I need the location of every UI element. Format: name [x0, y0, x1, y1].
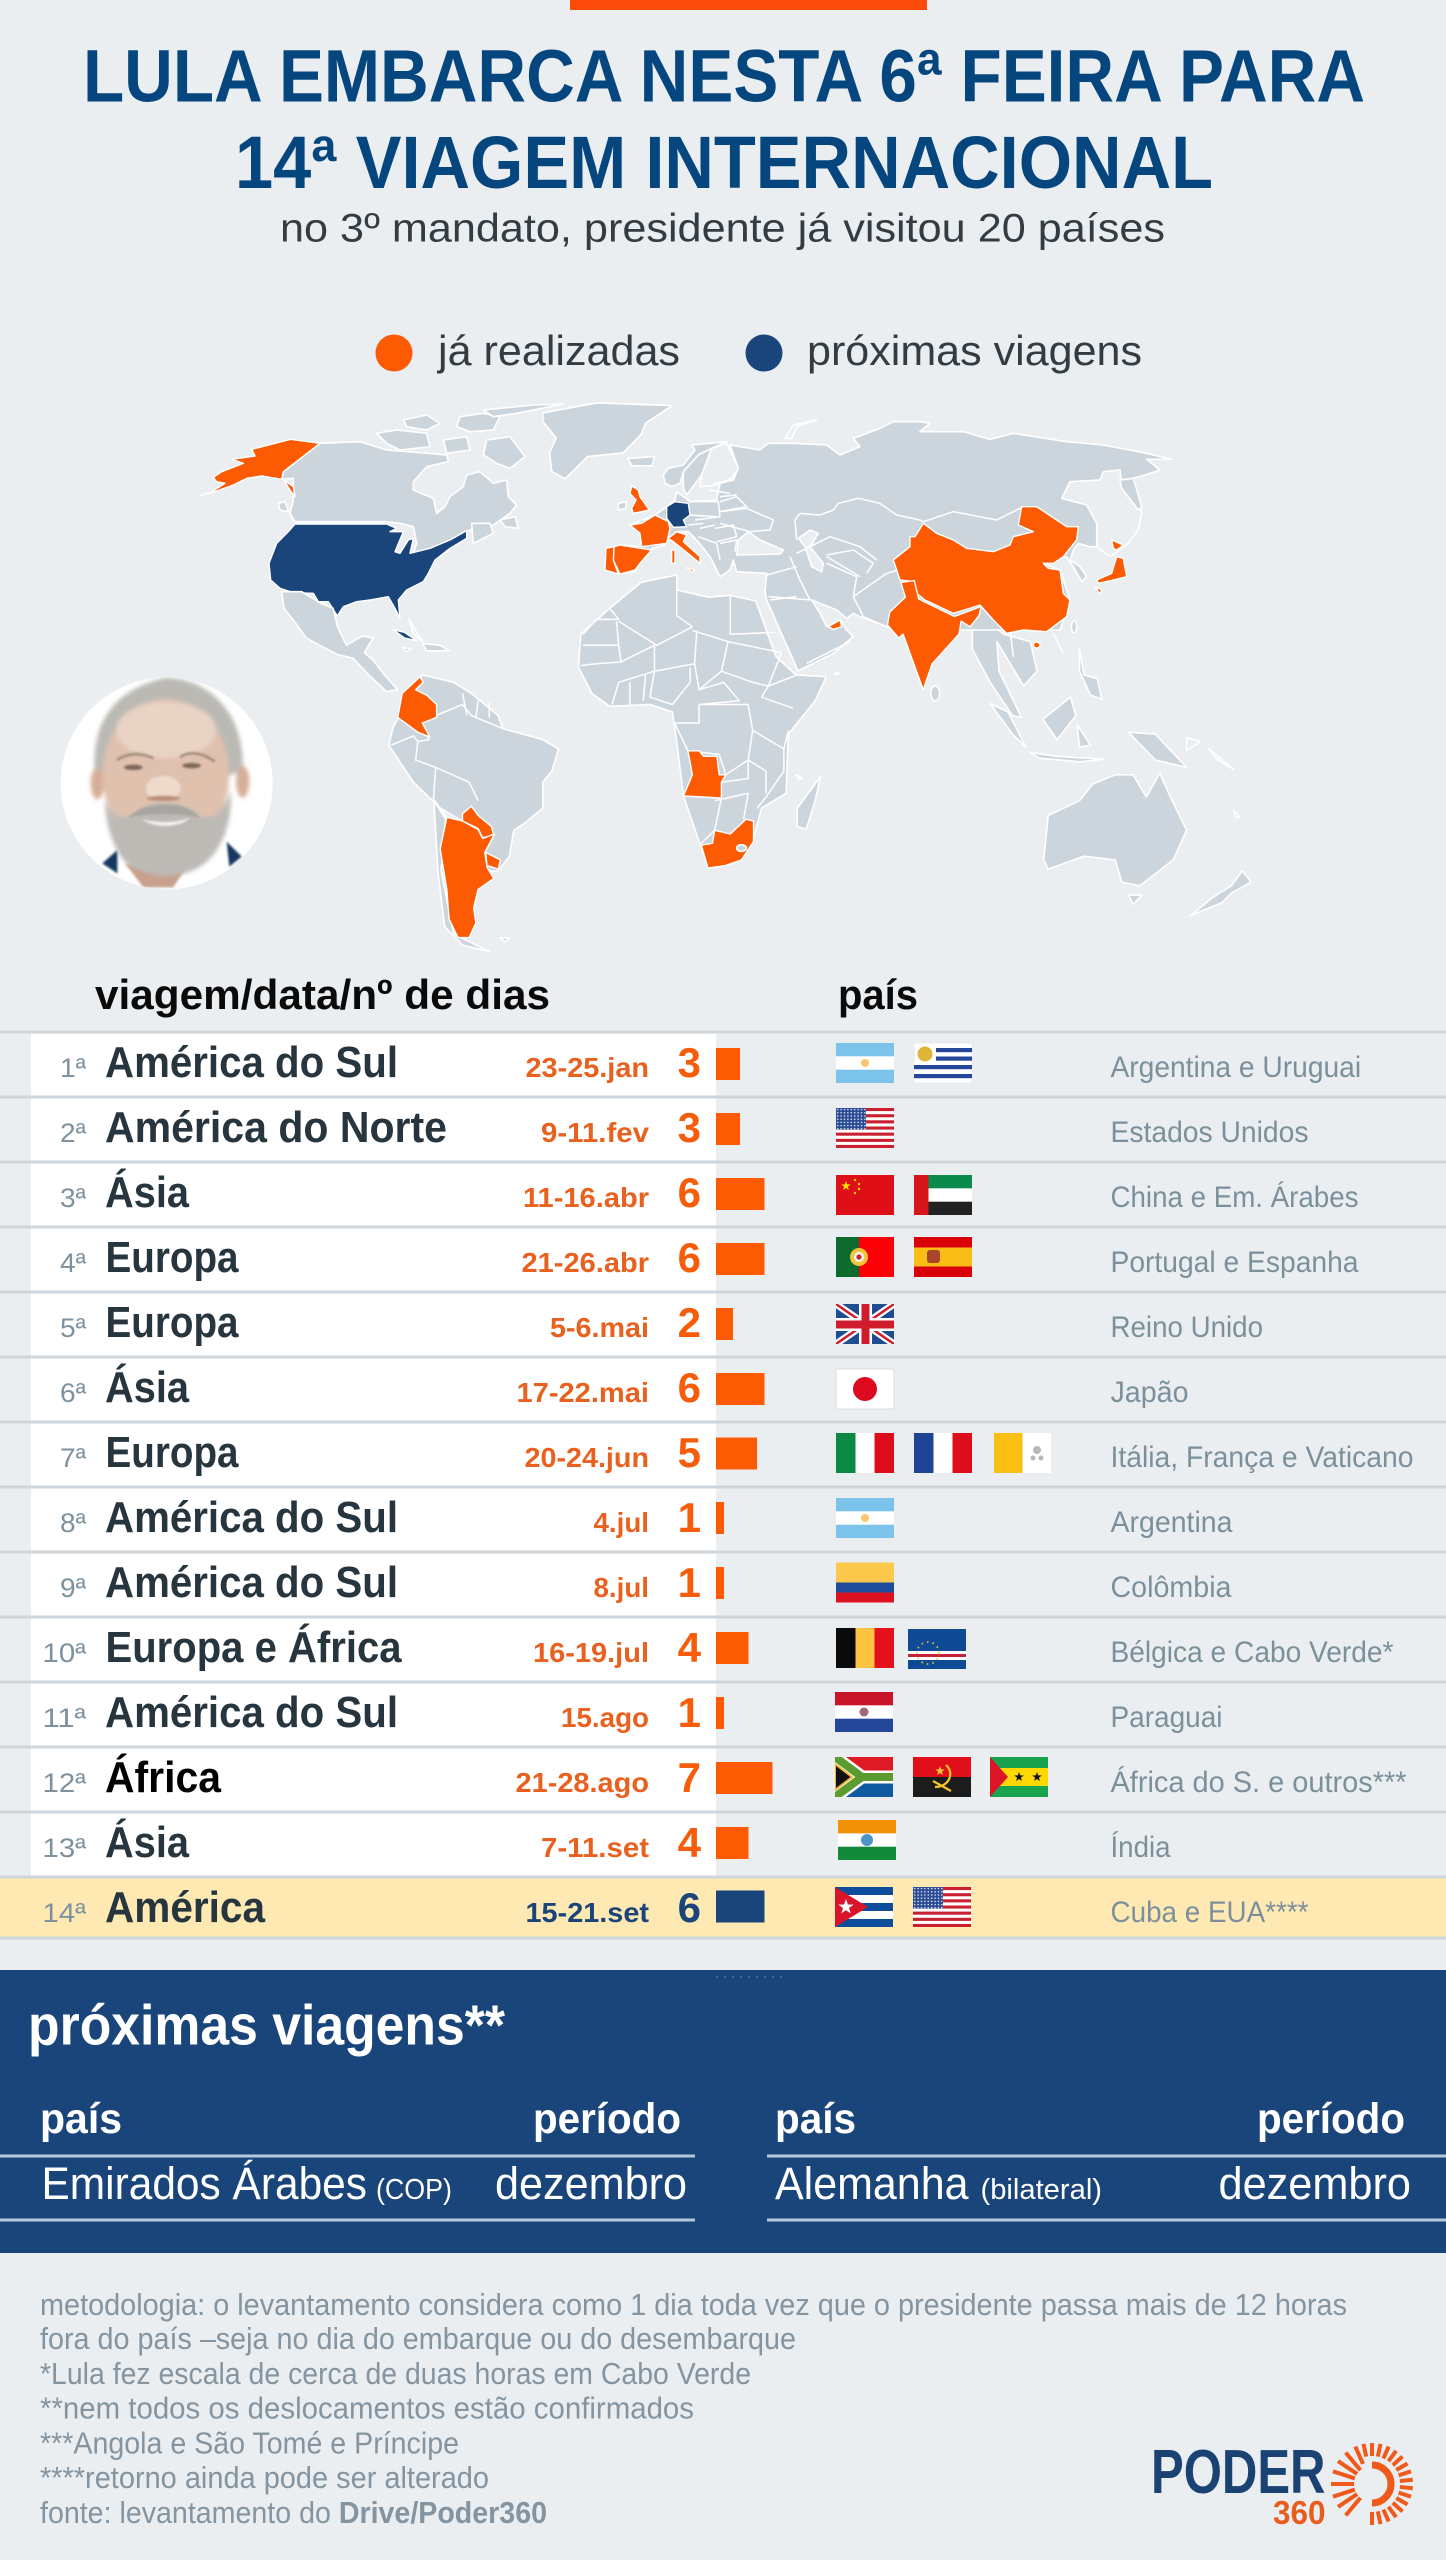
row 6: 17-22.mai [516, 1377, 649, 1408]
madagascar [797, 777, 820, 829]
bar: 5 days [716, 1438, 757, 1470]
row 12: 21-28.ago [516, 1767, 649, 1798]
row 10: Bélgica e Cabo Verde* [1110, 1636, 1394, 1669]
flags: china, emirates [836, 1175, 972, 1215]
row 7: Europa [106, 1428, 239, 1477]
subtitle: no 3º mandato, presidente já visitou 20 países [280, 206, 1165, 250]
title [83, 34, 1365, 204]
portugal [605, 547, 618, 574]
row 12: 7 [678, 1754, 701, 1801]
row 14 highlighted: América [105, 1883, 265, 1932]
row 5: 5-6.mai [550, 1312, 649, 1343]
alaska [208, 439, 320, 494]
flag: usa [836, 1108, 894, 1148]
highlighted row background [0, 1877, 1446, 1937]
methodology notes: metodologia: o levantamento considera como 1 dia toda vez que o presidente passa mais de 12 horas [40, 2287, 1347, 2322]
row 12: África [105, 1752, 221, 1802]
trip: alemanha [775, 2158, 1411, 2209]
row 3: 11-16.abr [523, 1182, 649, 1213]
row 11 [42, 1688, 1222, 1737]
bar: 6 days [716, 1373, 764, 1405]
right column header: período [1257, 2095, 1405, 2143]
row 6: Ásia [105, 1362, 189, 1412]
trip: alemanha: dezembro [1218, 2158, 1411, 2209]
argentina [440, 817, 495, 938]
paraguay [462, 806, 494, 838]
row 4: 6 [678, 1234, 701, 1281]
row 13: 13ª [42, 1833, 87, 1863]
bar: 6 days [716, 1243, 764, 1275]
row 14 highlighted: 6 [678, 1884, 701, 1931]
methodology notes: fonte: levantamento do Drive/Poder360 [40, 2495, 547, 2530]
row 11: 1 [678, 1689, 701, 1736]
row 2: América do Norte [105, 1103, 447, 1152]
uae [828, 620, 842, 629]
legend: próximas viagens: próximas viagens [807, 327, 1142, 374]
bar: 1 day [716, 1567, 724, 1599]
row 7: Itália, França e Vaticano [1110, 1441, 1414, 1474]
row 2: 3 [678, 1104, 701, 1151]
row 8: América do Sul [105, 1493, 398, 1542]
bar: 3 days [716, 1113, 740, 1145]
row 3 [60, 1167, 1358, 1217]
bar: 7 days [716, 1762, 772, 1794]
right column header [775, 2095, 1405, 2143]
methodology notes [40, 2287, 1347, 2530]
logo: poder360 [1151, 2438, 1413, 2531]
bar: 4 days [716, 1632, 748, 1664]
row 14 highlighted [42, 1883, 1309, 1932]
row 13: Índia [1110, 1831, 1171, 1864]
row 7: 5 [678, 1429, 701, 1476]
row 5: Europa [106, 1298, 239, 1347]
south america [389, 675, 558, 871]
africa [579, 575, 826, 867]
india [887, 581, 981, 690]
table header: país: país [838, 971, 918, 1018]
row 12 [44, 1754, 1406, 1798]
row 8: 1 [678, 1494, 701, 1541]
row 7 [60, 1428, 1414, 1477]
icon: sun [1331, 2443, 1413, 2525]
flag: united kingdom [836, 1304, 894, 1345]
row 7: 20-24.jun [524, 1442, 649, 1473]
canada [282, 442, 517, 553]
row 10: 10ª [42, 1638, 87, 1668]
row 2: Estados Unidos [1110, 1116, 1308, 1149]
nose [146, 776, 181, 801]
usa [269, 524, 467, 618]
row 9: Colômbia [1110, 1571, 1232, 1604]
row 2: 9-11.fev [541, 1117, 649, 1148]
left column header: país [40, 2095, 122, 2143]
face [102, 698, 232, 820]
greenland [543, 403, 672, 479]
row 9 [60, 1558, 1232, 1607]
row 8: Argentina [1110, 1506, 1233, 1539]
row 5 [61, 1304, 1262, 1346]
row 1: 1ª [60, 1053, 87, 1083]
row 10 [42, 1622, 1394, 1672]
row 5: 5ª [60, 1313, 87, 1343]
row 13 [42, 1817, 1171, 1867]
new zealand [1191, 871, 1251, 915]
bar: 1 day [716, 1502, 724, 1534]
france [630, 515, 670, 547]
caribbean [393, 619, 449, 652]
row 14 highlighted: 15-21.set [526, 1897, 649, 1928]
south-east asia and oceania [796, 621, 1251, 915]
angola [683, 751, 726, 798]
iceland [628, 457, 654, 466]
row 11: 11ª [42, 1703, 87, 1733]
bar: 6 days [716, 1890, 764, 1922]
row 7: 7ª [60, 1443, 87, 1473]
row 4: Portugal e Espanha [1110, 1246, 1359, 1279]
logo: poder360: PODER [1151, 2438, 1326, 2507]
australia [1044, 773, 1187, 886]
row 5: Reino Unido [1110, 1311, 1263, 1344]
panel heading: próximas viagens** [28, 1994, 506, 2058]
world map [200, 403, 1251, 952]
row 6: Japão [1110, 1376, 1188, 1409]
row 12: África do S. e outros*** [1110, 1766, 1407, 1799]
row 2 [60, 1103, 1308, 1152]
row 3: China e Em. Árabes [1110, 1181, 1358, 1214]
title: 14ª VIAGEM INTERNACIONAL [235, 121, 1213, 204]
row 3: 3ª [60, 1183, 87, 1213]
north america [200, 404, 563, 618]
flag: japan [836, 1369, 894, 1409]
row 12: 12ª [42, 1768, 87, 1798]
map legend [376, 327, 1142, 374]
row 6: 6 [678, 1364, 701, 1411]
smile [142, 818, 190, 826]
moustache [128, 805, 200, 818]
bar: 4 days [716, 1827, 748, 1859]
logo: poder360: 360 [1273, 2494, 1326, 2531]
right column header: país [775, 2095, 856, 2143]
bar: 3 days [716, 1048, 740, 1080]
trip: emirados árabes: Emirados Árabes [42, 2158, 367, 2209]
spain [613, 545, 652, 574]
table header: viagem/data/dias: viagem/data/nº de dias [95, 971, 550, 1018]
row 1 [60, 1038, 1361, 1087]
sweden [683, 448, 712, 495]
trip: alemanha: Alemanha [775, 2158, 969, 2209]
row 1: Argentina e Uruguai [1110, 1051, 1361, 1084]
row 10: 4 [678, 1624, 702, 1671]
white row background [31, 1032, 716, 1877]
row 4 [60, 1233, 1359, 1282]
row 14 highlighted: 14ª [42, 1898, 87, 1928]
arctic islands [278, 404, 563, 543]
jacket [102, 850, 117, 873]
methodology notes: **nem todos os deslocamentos estão confirmados [40, 2390, 694, 2426]
row 9: América do Sul [105, 1558, 398, 1607]
flags: portugal, spain [836, 1237, 972, 1277]
trip: emirados árabes: dezembro [495, 2158, 687, 2209]
row 4: 4ª [60, 1248, 87, 1278]
row 3: 6 [678, 1169, 701, 1216]
indochina [972, 627, 1037, 717]
flag: colombia [836, 1562, 894, 1602]
row 8 [60, 1493, 1233, 1542]
top accent bar [570, 0, 927, 10]
left column header [40, 2095, 681, 2143]
eyes [124, 765, 143, 770]
bar: 2 days [716, 1308, 733, 1340]
methodology notes: fora do país –seja no dia do embarque ou do desembarque [40, 2321, 796, 2356]
flags: argentina, uruguay [836, 1043, 972, 1083]
flags: cuba, usa [835, 1887, 971, 1927]
row 9: 1 [678, 1559, 701, 1606]
row 8: 4.jul [594, 1507, 649, 1538]
row 1: 23-25.jan [526, 1052, 649, 1083]
finland [700, 443, 738, 487]
row 9: 9ª [60, 1573, 87, 1603]
row 11: 15.ago [561, 1702, 649, 1733]
row 4: Europa [106, 1233, 239, 1282]
row 1: 3 [678, 1039, 701, 1086]
row 4: 21-26.abr [522, 1247, 649, 1278]
flag: argentina [836, 1498, 894, 1538]
germany [667, 502, 690, 527]
flags: italy, france, vatican [836, 1433, 1051, 1473]
eurasia [605, 420, 1172, 671]
bar: 1 day [716, 1697, 724, 1729]
neck [125, 863, 187, 887]
trip: emirados árabes: (COP) [376, 2174, 452, 2206]
flag: paraguay [835, 1692, 893, 1732]
row 10: Europa e África [106, 1622, 402, 1672]
tasmania [1129, 895, 1142, 904]
hair [94, 677, 243, 777]
japan [1095, 540, 1127, 594]
caspian sea [798, 530, 823, 572]
colombia [398, 677, 437, 737]
row 13: 4 [678, 1819, 702, 1866]
methodology notes: *Lula fez escala de cerca de duas horas em Cabo Verde [40, 2356, 751, 2391]
islands [796, 621, 1240, 817]
row 5: 2 [678, 1299, 701, 1346]
row 6: 6ª [60, 1378, 87, 1408]
row 3: Ásia [105, 1167, 189, 1217]
row 11: Paraguai [1110, 1701, 1222, 1734]
legend: já realizadas: já realizadas [436, 327, 680, 374]
row 6 [60, 1362, 1188, 1412]
methodology notes: ****retorno ainda pode ser alterado [40, 2460, 489, 2495]
flags: belgium, cape verde [836, 1628, 966, 1669]
trip: emirados árabes [42, 2158, 687, 2209]
left column header: período [533, 2095, 681, 2143]
united kingdom [630, 486, 649, 513]
row 1: América do Sul [105, 1038, 398, 1087]
row 10: 16-19.jul [533, 1637, 649, 1668]
norway [663, 442, 727, 487]
bar: 6 days [716, 1178, 764, 1210]
row 13: Ásia [105, 1817, 189, 1867]
row 13: 7-11.set [541, 1832, 649, 1863]
china [893, 507, 1078, 633]
ears [91, 767, 104, 799]
beard [105, 790, 231, 876]
south africa [701, 819, 754, 868]
flags: south africa, angola, sao tome [835, 1757, 1048, 1797]
row 14 highlighted: Cuba e EUA**** [1110, 1896, 1309, 1929]
panel: próximas viagens [0, 1970, 1446, 2253]
portrait of lula [61, 677, 273, 889]
flag: india [838, 1820, 896, 1860]
sea of okhotsk [1062, 470, 1142, 557]
row 9: 8.jul [594, 1572, 649, 1603]
row 2: 2ª [60, 1118, 87, 1148]
mexico and central america [282, 592, 398, 692]
kamchatka [1120, 478, 1142, 510]
uruguay [486, 852, 500, 869]
row 8: 8ª [60, 1508, 87, 1538]
novaya zemlya [785, 420, 817, 438]
black sea [737, 532, 783, 555]
trip: alemanha: (bilateral) [980, 2174, 1102, 2206]
row 11: América do Sul [105, 1688, 398, 1737]
italy [668, 532, 700, 572]
methodology notes: ***Angola e São Tomé e Príncipe [40, 2426, 459, 2460]
